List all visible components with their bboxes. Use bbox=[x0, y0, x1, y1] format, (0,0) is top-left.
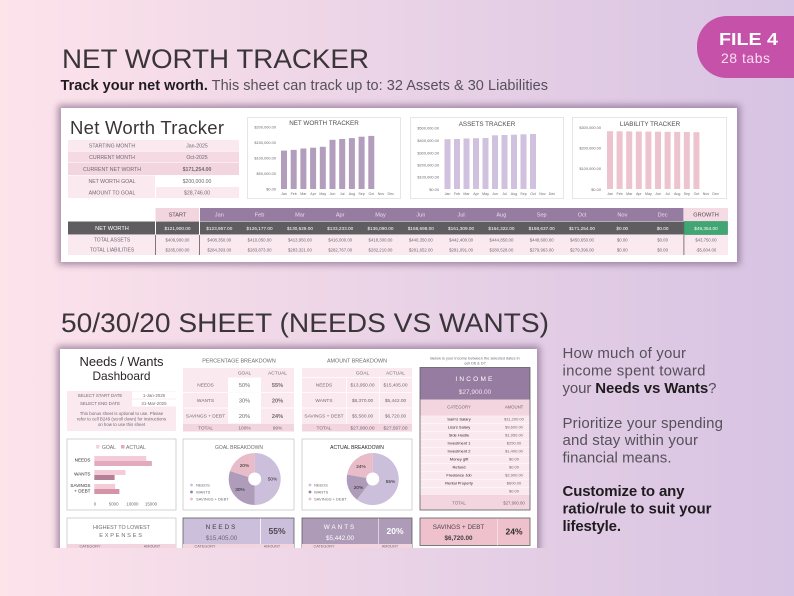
income table: $27,900.00 bbox=[503, 500, 525, 506]
income table: $1,400.00 bbox=[505, 448, 524, 454]
income table: $11,200.00 bbox=[504, 416, 525, 422]
monthly data table: GROWTH bbox=[693, 212, 719, 218]
income table: INCOME bbox=[455, 376, 495, 383]
panel: needs vs wants dashboard bbox=[57, 346, 540, 556]
table: amount breakdown: $13,950.00 bbox=[350, 382, 375, 388]
summary table: $200,000.00 bbox=[183, 179, 212, 185]
bar chart: goal vs actual: 10000 bbox=[126, 502, 139, 506]
income table: $0.00 bbox=[509, 456, 520, 462]
monthly data table: $164,322.00 bbox=[488, 226, 515, 231]
bar chart: liability tracker: Oct bbox=[694, 192, 699, 196]
monthly data table: $171,254.00 bbox=[569, 226, 595, 231]
monthly data table: $281,652.00 bbox=[409, 248, 433, 252]
text block: customize ratio: lifestyle. bbox=[562, 518, 621, 535]
pie chart: goal breakdown: 30% bbox=[235, 487, 246, 493]
dashboard title bbox=[80, 356, 163, 380]
table: amount breakdown: WANTS bbox=[315, 398, 333, 404]
bar chart: net worth tracker: Sep bbox=[358, 192, 365, 196]
card: savings and debt: SAVINGS + DEBT bbox=[433, 524, 484, 531]
income table: Side Hustle bbox=[449, 432, 470, 438]
bar chart: goal vs actual: WANTS bbox=[74, 472, 90, 476]
monthly data table: $121,900.00 bbox=[164, 226, 191, 231]
table: percentage breakdown: NEEDS bbox=[197, 382, 214, 388]
bar chart: liability tracker: May bbox=[645, 192, 652, 196]
monthly data table: $282,210.00 bbox=[369, 248, 393, 252]
monthly data table: $408,350.00 bbox=[207, 238, 232, 242]
monthly data table: $418,300.00 bbox=[369, 238, 393, 242]
bar chart: liability tracker: Jul bbox=[665, 192, 670, 196]
monthly data table: $161,309.00 bbox=[448, 226, 475, 231]
bar chart: net worth tracker: Mar bbox=[300, 192, 307, 196]
table: percentage breakdown: PERCENTAGE BREAKDOWN bbox=[202, 358, 276, 364]
card: wants: CATEGORY bbox=[314, 544, 335, 548]
bar chart: assets tracker: $300,000.00 bbox=[417, 150, 440, 156]
note above income bbox=[430, 357, 520, 364]
card: needs: AMOUNT bbox=[264, 544, 281, 548]
summary table: CURRENT MONTH bbox=[89, 155, 135, 161]
monthly data table: $406,900.00 bbox=[166, 238, 190, 242]
income table: TOTAL bbox=[452, 500, 466, 506]
bar chart: assets tracker: $0.00 bbox=[429, 187, 440, 192]
table: percentage breakdown: TOTAL bbox=[198, 426, 213, 432]
date selector bbox=[67, 391, 176, 431]
summary table: CURRENT NET WORTH bbox=[83, 167, 141, 173]
pie chart: goal breakdown: NEEDS bbox=[196, 482, 210, 488]
monthly data table: $440,350.00 bbox=[409, 238, 433, 242]
table: amount breakdown: $27,900.00 bbox=[350, 426, 375, 432]
monthly data table: $413,950.00 bbox=[288, 238, 312, 242]
bar chart: net worth tracker: Jul bbox=[340, 192, 345, 196]
bar chart: goal vs actual: ACTUAL bbox=[126, 445, 146, 451]
bar chart: assets tracker: Jul bbox=[502, 192, 507, 196]
text block: needs vs wants question: income spent toward bbox=[562, 362, 706, 380]
table: amount breakdown: $15,405.00 bbox=[383, 382, 408, 388]
monthly data table: NET WORTH bbox=[95, 226, 129, 232]
monthly data table: $123,957.00 bbox=[206, 226, 233, 231]
bar chart: assets tracker: Sep bbox=[520, 192, 527, 196]
text block: prioritize spending bbox=[562, 415, 723, 466]
monthly data table: $410,050.00 bbox=[248, 238, 272, 242]
bar chart: liability tracker: $100,000.00 bbox=[579, 166, 602, 171]
text block: customize ratio bbox=[562, 483, 712, 535]
bar chart: assets tracker: Jan bbox=[445, 192, 450, 196]
title: net worth tracker: NET WORTH TRACKER bbox=[62, 44, 369, 74]
bar chart: assets tracker: $500,000.00 bbox=[417, 126, 440, 130]
subtitle: Track your net worth. This sheet can track up to: 32 Assets & 30 Liabilities bbox=[60, 78, 548, 94]
bar chart: assets tracker: ASSETS TRACKER bbox=[459, 121, 516, 128]
monthly data table: TOTAL ASSETS bbox=[94, 238, 131, 244]
bar chart: liability tracker bbox=[572, 118, 726, 198]
bar chart: liability tracker: Aug bbox=[674, 192, 680, 196]
summary table: Oct-2025 bbox=[186, 155, 208, 161]
date selector: 1-Jan-2025 bbox=[143, 393, 166, 398]
monthly data table: $0.00 bbox=[617, 238, 628, 242]
card: savings and debt bbox=[420, 518, 530, 546]
monthly data table: $130,629.00 bbox=[287, 226, 313, 231]
monthly data table: $448,600.00 bbox=[530, 238, 554, 242]
monthly data table: START bbox=[169, 212, 187, 218]
monthly data table: Jul bbox=[458, 212, 465, 218]
table: amount breakdown: SAVINGS + DEBT bbox=[304, 414, 344, 420]
monthly data table: $284,393.00 bbox=[207, 248, 232, 252]
monthly data table: $283,321.00 bbox=[288, 248, 312, 252]
pie chart: actual breakdown: ACTUAL BREAKDOWN bbox=[330, 445, 384, 451]
monthly data table: Nov bbox=[617, 212, 627, 218]
income table: Lisa's Salary bbox=[448, 424, 470, 430]
table: percentage breakdown: 100% bbox=[238, 426, 251, 432]
monthly data table: $126,177.00 bbox=[247, 226, 273, 231]
monthly data table: Jun bbox=[416, 212, 425, 218]
income table: Refund bbox=[453, 464, 465, 470]
bar chart: goal vs actual: 5000 bbox=[109, 502, 119, 506]
monthly data table: $49,354.00 bbox=[694, 226, 718, 231]
summary table: AMOUNT TO GOAL bbox=[89, 190, 135, 196]
monthly data table: $133,233.00 bbox=[327, 226, 354, 231]
pie chart: actual breakdown: 24% bbox=[356, 464, 367, 470]
monthly data table: Sep bbox=[537, 212, 547, 218]
monthly data table: $0.00 bbox=[617, 248, 628, 252]
bar chart: liability tracker: Feb bbox=[616, 192, 623, 196]
bar chart: assets tracker bbox=[410, 118, 564, 198]
bar chart: goal vs actual: SAVINGS bbox=[70, 483, 90, 488]
table: amount breakdown: $5,580.00 bbox=[352, 414, 374, 420]
bar chart: liability tracker: Dec bbox=[712, 192, 719, 196]
pie chart: actual breakdown: SAVINGS + DEBT bbox=[314, 496, 347, 502]
summary table bbox=[68, 140, 239, 198]
monthly data table: -$5,604.00 bbox=[696, 248, 717, 252]
text block: prioritize spending: Prioritize your spending bbox=[562, 415, 723, 432]
pie chart: actual breakdown: 20% bbox=[354, 485, 364, 491]
bar chart: net worth tracker: Aug bbox=[349, 192, 355, 196]
date selector: This bonus sheet is optional to use. Please bbox=[80, 411, 164, 416]
monthly data table: Jan bbox=[215, 212, 224, 218]
income table: Sam's Salary bbox=[447, 416, 471, 422]
monthly data table: Apr bbox=[336, 212, 345, 218]
card: highest to lowest expenses: AMOUNT bbox=[144, 544, 161, 548]
table: percentage breakdown bbox=[183, 358, 294, 432]
monthly data table: Oct bbox=[578, 212, 587, 218]
note above income: cell D6 & D7 bbox=[464, 360, 486, 366]
bar chart: net worth tracker: NET WORTH TRACKER bbox=[289, 120, 359, 127]
card: needs bbox=[183, 518, 294, 552]
income table: Investment 1 bbox=[448, 440, 471, 446]
bar chart: liability tracker: $300,000.00 bbox=[579, 125, 602, 130]
dashboard title: Needs / Wants bbox=[80, 354, 164, 369]
table: amount breakdown: GOAL bbox=[356, 370, 369, 376]
bar chart: net worth tracker: Oct bbox=[369, 192, 374, 196]
bar chart: assets tracker: Oct bbox=[530, 192, 536, 196]
table: percentage breakdown: 99% bbox=[273, 426, 283, 432]
monthly data table: $450,650.00 bbox=[570, 238, 595, 242]
bar chart: net worth tracker: $0.00 bbox=[266, 186, 277, 192]
summary table: STARTING MONTH bbox=[89, 144, 135, 150]
table: amount breakdown: AMOUNT BREAKDOWN bbox=[327, 358, 387, 364]
bar chart: liability tracker: LIABILITY TRACKER bbox=[620, 121, 681, 128]
income table: $250.00 bbox=[507, 440, 522, 446]
monthly data table: $279,963.00 bbox=[530, 248, 554, 252]
monthly data table: $442,400.00 bbox=[449, 238, 474, 242]
income table: Rental Property bbox=[445, 480, 473, 486]
table: percentage breakdown: 55% bbox=[272, 383, 283, 389]
bar chart: assets tracker: Nov bbox=[539, 192, 546, 196]
monthly data table: Mar bbox=[295, 212, 305, 218]
bar chart: assets tracker: Feb bbox=[454, 192, 460, 196]
bar chart: net worth tracker: $150,000.00 bbox=[254, 140, 277, 145]
summary table: $28,746.00 bbox=[184, 190, 210, 196]
bar chart: goal vs actual: NEEDS bbox=[75, 458, 90, 462]
note above income: Below is your income between the selected dates in bbox=[430, 356, 520, 360]
card: wants: WANTS bbox=[324, 524, 356, 531]
bar chart: net worth tracker: $100,000.00 bbox=[254, 156, 277, 160]
monthly data table: $168,637.00 bbox=[529, 226, 555, 231]
bar chart: liability tracker: Mar bbox=[626, 192, 633, 196]
bar chart: net worth tracker: Nov bbox=[378, 192, 384, 196]
bar chart: net worth tracker: $200,000.00 bbox=[254, 124, 277, 130]
bar chart: assets tracker: May bbox=[482, 192, 489, 196]
date selector: on how to use this sheet bbox=[98, 422, 146, 427]
bar chart: liability tracker: Jun bbox=[655, 192, 661, 196]
monthly data table: $281,091.00 bbox=[449, 248, 474, 252]
table: percentage breakdown: SAVINGS + DEBT bbox=[186, 414, 225, 420]
bar chart: net worth tracker: $50,000.00 bbox=[257, 171, 277, 176]
income table bbox=[420, 368, 530, 510]
table: amount breakdown: $27,567.00 bbox=[383, 426, 408, 432]
table: amount breakdown: NEEDS bbox=[316, 382, 332, 388]
bar chart: liability tracker: Apr bbox=[636, 192, 642, 196]
card: needs: 55% bbox=[268, 526, 286, 536]
text block: prioritize spending: and stay within your bbox=[562, 432, 698, 449]
monthly data table: $0.00 bbox=[657, 238, 669, 242]
monthly data table: $280,528.00 bbox=[489, 248, 514, 252]
income table: $1,950.00 bbox=[505, 432, 524, 438]
monthly data table: $282,767.00 bbox=[328, 248, 353, 252]
income table: $0.00 bbox=[509, 464, 520, 470]
pie chart: actual breakdown: 55% bbox=[386, 479, 396, 485]
card: highest to lowest expenses: EXPENSES bbox=[99, 533, 144, 539]
monthly data table: Aug bbox=[496, 212, 506, 218]
bar chart: net worth tracker: May bbox=[319, 192, 326, 196]
date selector: SELECT START DATE bbox=[78, 393, 122, 398]
bar chart: liability tracker: Jan bbox=[607, 192, 613, 196]
title: 50/30/20 sheet: 50/30/20 SHEET (NEEDS VS WANTS) bbox=[61, 308, 549, 338]
monthly data table: $444,850.00 bbox=[489, 238, 514, 242]
pie chart: goal breakdown: GOAL BREAKDOWN bbox=[215, 445, 263, 451]
pie chart: goal breakdown: SAVINGS + DEBT bbox=[196, 496, 229, 502]
pie chart: actual breakdown: NEEDS bbox=[314, 482, 328, 488]
text block: needs vs wants question bbox=[562, 345, 716, 397]
bar chart: liability tracker: Nov bbox=[703, 192, 709, 196]
card: wants: 20% bbox=[386, 526, 404, 536]
pie chart: goal breakdown: WANTS bbox=[196, 490, 211, 494]
table: percentage breakdown: 20% bbox=[239, 414, 250, 420]
monthly data table: $285,000.00 bbox=[166, 248, 190, 252]
income table: $0.00 bbox=[509, 488, 520, 494]
date selector: SELECT END DATE bbox=[80, 401, 120, 406]
bar chart: goal vs actual: 0 bbox=[94, 502, 97, 506]
monthly data table bbox=[68, 208, 728, 255]
table: percentage breakdown: 30% bbox=[239, 398, 250, 404]
sheet title: Net Worth Tracker bbox=[70, 117, 224, 138]
income table: $27,900.00 bbox=[459, 389, 492, 396]
card: needs: $15,405.00 bbox=[206, 535, 238, 542]
bar chart: goal vs actual: 15000 bbox=[145, 502, 158, 506]
summary table: Jan-2025 bbox=[186, 144, 208, 150]
income table: $600.00 bbox=[507, 480, 522, 486]
card: highest to lowest expenses bbox=[67, 518, 176, 552]
bar chart: net worth tracker: Feb bbox=[291, 192, 297, 196]
monthly data table: $0.00 bbox=[657, 248, 669, 252]
monthly data table: $279,396.00 bbox=[570, 248, 595, 252]
table: amount breakdown: $5,442.00 bbox=[385, 398, 407, 404]
summary table: $171,254.00 bbox=[183, 167, 212, 173]
date selector: 31-Mar-2025 bbox=[141, 401, 167, 406]
monthly data table: May bbox=[375, 212, 386, 218]
bar chart: liability tracker: $0.00 bbox=[591, 187, 602, 192]
income table: AMOUNT bbox=[505, 404, 524, 410]
bar chart: assets tracker: $400,000.00 bbox=[417, 138, 440, 143]
monthly data table: $283,873.00 bbox=[248, 248, 272, 252]
bar chart: liability tracker: $200,000.00 bbox=[579, 146, 602, 150]
bar chart: assets tracker: $100,000.00 bbox=[417, 174, 440, 180]
card: wants: $5,442.00 bbox=[326, 535, 355, 542]
income table: Freelance Job bbox=[446, 472, 472, 478]
table: percentage breakdown: WANTS bbox=[197, 398, 214, 404]
bar chart: goal vs actual: GOAL bbox=[102, 445, 116, 451]
bar chart: net worth tracker bbox=[248, 118, 400, 198]
table: percentage breakdown: 24% bbox=[272, 414, 283, 420]
text block: prioritize spending: financial means. bbox=[562, 450, 672, 466]
table: percentage breakdown: GOAL bbox=[238, 370, 251, 376]
table: amount breakdown: ACTUAL bbox=[386, 370, 405, 376]
date selector: refer to cell B249 (scroll down) for instructions bbox=[77, 416, 167, 422]
bar chart: goal vs actual bbox=[67, 439, 176, 510]
income table: $2,900.00 bbox=[505, 472, 524, 478]
monthly data table: $416,000.00 bbox=[328, 238, 353, 242]
card: wants: AMOUNT bbox=[382, 544, 399, 548]
monthly data table: $158,698.00 bbox=[408, 226, 434, 231]
bar chart: assets tracker: Aug bbox=[511, 192, 517, 196]
file badge: FILE 4 bbox=[719, 29, 778, 49]
bar chart: assets tracker: Jun bbox=[492, 192, 498, 196]
pie chart: goal breakdown bbox=[183, 439, 294, 510]
bar chart: net worth tracker: Jun bbox=[330, 192, 335, 196]
bar chart: assets tracker: $200,000.00 bbox=[417, 162, 440, 168]
bar chart: assets tracker: Mar bbox=[463, 192, 470, 196]
table: percentage breakdown: ACTUAL bbox=[268, 370, 287, 376]
card: needs: NEEDS bbox=[206, 524, 237, 531]
table: amount breakdown: TOTAL bbox=[316, 426, 332, 432]
dashboard title: Dashboard bbox=[92, 369, 150, 383]
panel: net worth spreadsheet bbox=[58, 105, 740, 265]
monthly data table: Dec bbox=[658, 212, 668, 218]
card: wants bbox=[302, 518, 412, 552]
bar chart: net worth tracker: Apr bbox=[310, 192, 317, 196]
file badge: 28 tabs bbox=[721, 50, 770, 66]
bar chart: assets tracker: Apr bbox=[473, 192, 480, 196]
table: amount breakdown bbox=[302, 358, 412, 432]
bar chart: goal vs actual: + DEBT bbox=[74, 488, 91, 494]
monthly data table: $136,090.00 bbox=[367, 226, 394, 231]
pie chart: goal breakdown: 50% bbox=[268, 476, 278, 482]
bar chart: liability tracker: Sep bbox=[684, 192, 690, 196]
table: percentage breakdown: 20% bbox=[272, 398, 283, 404]
bar chart: assets tracker: Dec bbox=[549, 192, 555, 196]
summary table: NET WORTH GOAL bbox=[88, 179, 136, 185]
card: savings and debt: $6,720.00 bbox=[444, 535, 473, 542]
bar chart: net worth tracker: Dec bbox=[387, 192, 394, 196]
card: savings and debt: 24% bbox=[505, 526, 523, 536]
income table: CATEGORY bbox=[447, 404, 471, 410]
pie chart: actual breakdown: WANTS bbox=[314, 490, 329, 494]
text block: customize ratio: ratio/rule to suit your bbox=[562, 500, 712, 518]
text block: needs vs wants question: your Needs vs Wants? bbox=[562, 380, 716, 397]
card: needs: CATEGORY bbox=[195, 544, 216, 548]
monthly data table: Feb bbox=[255, 212, 264, 218]
monthly data table: $0.00 bbox=[616, 226, 629, 231]
monthly data table: $43,750.00 bbox=[695, 238, 717, 242]
pie chart: goal breakdown: 20% bbox=[240, 463, 250, 469]
table: amount breakdown: $8,370.00 bbox=[352, 398, 374, 404]
bar chart: net worth tracker: Jan bbox=[281, 192, 287, 196]
text block: needs vs wants question: How much of your bbox=[562, 345, 686, 362]
table: percentage breakdown: 50% bbox=[239, 383, 250, 389]
monthly data table: TOTAL LIABILITIES bbox=[90, 248, 135, 254]
card: highest to lowest expenses: HIGHEST TO LOWEST bbox=[93, 525, 151, 531]
table: amount breakdown: $6,720.00 bbox=[385, 414, 407, 420]
income table: Investment 2 bbox=[448, 448, 471, 454]
income table: $9,600.00 bbox=[505, 424, 524, 430]
income table: Money gift bbox=[450, 456, 469, 462]
file badge bbox=[697, 16, 794, 78]
pie chart: actual breakdown bbox=[302, 439, 412, 510]
card: highest to lowest expenses: CATEGORY bbox=[80, 544, 101, 548]
monthly data table: $0.00 bbox=[657, 226, 669, 231]
text block: customize ratio: Customize to any bbox=[562, 483, 685, 500]
